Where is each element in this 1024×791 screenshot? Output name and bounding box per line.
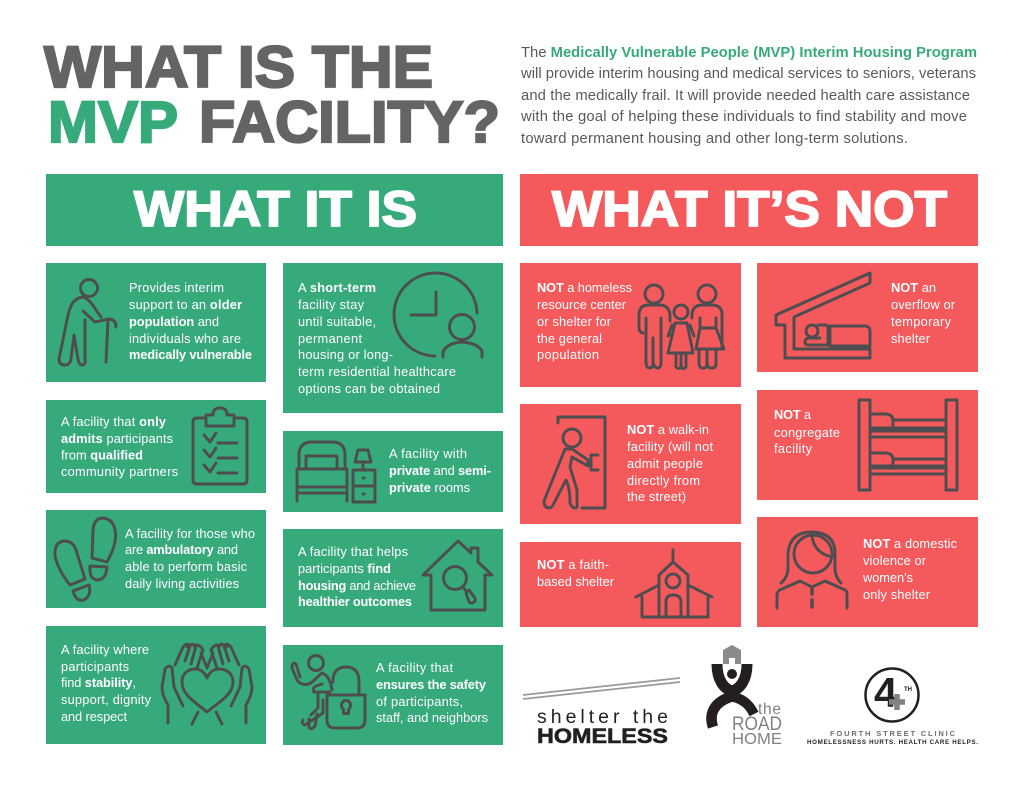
text: qualified partners: community partners	[61, 464, 178, 479]
logo: shelter the homeless: shelter the	[537, 706, 668, 728]
panel: not homeless shelter	[520, 263, 741, 387]
text: older population: Provides interim	[129, 280, 224, 295]
panel: older population	[46, 263, 266, 382]
text: find housing: healthier outcomes	[298, 594, 412, 609]
text: stability	[61, 642, 152, 724]
intro paragraph: with the goal of helping these individuals to find stability and move	[520, 109, 967, 125]
text: find housing: housing and achieve	[298, 578, 416, 593]
heading: what it is	[46, 174, 503, 246]
icon: family	[639, 285, 724, 368]
icon: footprints	[55, 518, 116, 600]
panel: safety	[283, 645, 503, 745]
text: short-term: housing or long-	[298, 347, 393, 362]
text: not congregate: NOT a	[774, 407, 812, 422]
text: not homeless shelter: resource center	[537, 297, 627, 312]
logo: fourth street clinic: 4	[874, 669, 898, 716]
icon: church	[636, 550, 712, 617]
intro paragraph: will provide interim housing and medical services to seniors, veterans	[520, 66, 976, 82]
logo: the road home	[712, 645, 782, 748]
icon: clipboard checklist	[193, 408, 247, 484]
text: short-term: options can be obtained	[298, 381, 440, 396]
logo: fourth street clinic: HOMELESSNESS HURTS. HEALTH CARE HELPS.	[807, 739, 978, 746]
icon: house with magnifier	[423, 541, 492, 610]
panel: not faith-based	[520, 542, 741, 627]
text: not homeless shelter: the general	[537, 331, 602, 346]
icon: elderly person with cane	[59, 280, 116, 365]
text: not domestic violence: violence or	[863, 553, 927, 568]
text: short-term: facility stay	[298, 297, 365, 312]
text: not walk-in: NOT a walk-in	[627, 422, 709, 437]
text: older population: individuals who are	[129, 331, 241, 346]
text: stability: support, dignity	[61, 692, 152, 707]
text: safety: A facility that	[376, 660, 453, 675]
text: stability: find stability,	[61, 675, 136, 690]
text: not congregate: congregate	[774, 425, 840, 440]
text: short-term: term residential healthcare	[298, 364, 456, 379]
text: not domestic violence: only shelter	[863, 587, 931, 602]
icon: person climbing padlock	[292, 656, 365, 729]
intro paragraph	[520, 45, 977, 147]
text: not walk-in: directly from	[627, 473, 700, 488]
text: private rooms: private rooms	[389, 480, 470, 495]
panel: short-term	[283, 263, 503, 413]
intro paragraph: and the medically frail. It will provide needed health care assistance	[521, 88, 970, 104]
text: older population: medically vulnerable	[129, 347, 252, 362]
logo: the road home: the	[758, 701, 781, 718]
text: not walk-in: admit people	[627, 456, 703, 471]
text: private rooms: private and semi-	[389, 463, 491, 478]
logo: fourth street clinic	[807, 668, 978, 746]
text: qualified partners	[61, 414, 178, 479]
text: ambulatory: daily living activities	[125, 576, 239, 591]
text: ambulatory: are ambulatory and	[125, 542, 238, 557]
text: not walk-in: facility (will not	[627, 439, 713, 454]
text: not overflow: NOT an	[891, 280, 936, 295]
panel: not domestic violence	[757, 517, 978, 627]
text: not faith-based: based shelter	[537, 574, 615, 589]
text: qualified partners: A facility that only	[61, 414, 167, 429]
text: not walk-in	[627, 422, 713, 504]
icon: bunk bed	[859, 400, 957, 490]
text: older population: population and	[129, 314, 219, 329]
panel: qualified partners	[46, 400, 266, 493]
panel: stability	[46, 626, 266, 744]
icon: woman	[777, 532, 847, 608]
text: short-term: until suitable,	[298, 314, 376, 329]
text: private rooms: A facility with	[389, 446, 467, 461]
title: WHAT IS THE	[44, 35, 433, 100]
text: ambulatory: able to perform basic	[125, 559, 248, 574]
text: not domestic violence: women’s	[862, 570, 913, 585]
intro paragraph: The Medically Vulnerable People (MVP) Interim Housing Program	[521, 45, 977, 61]
text: older population: support to an older	[129, 297, 242, 312]
text: qualified partners: admits participants	[61, 431, 173, 446]
text: short-term: A short-term	[298, 280, 376, 295]
text: ambulatory	[125, 526, 255, 591]
text: not faith-based	[537, 557, 615, 589]
text: not overflow: overflow or	[891, 297, 956, 312]
text: older population	[129, 280, 252, 362]
text: not overflow: temporary	[891, 314, 952, 329]
text: stability: A facility where	[61, 642, 149, 657]
icon: hands holding heart	[162, 644, 252, 724]
text: not overflow	[891, 280, 956, 346]
text: not homeless shelter	[537, 280, 632, 362]
text: not domestic violence: NOT a domestic	[863, 536, 958, 551]
icon: bed and nightstand	[297, 442, 375, 502]
logo: fourth street clinic: TH	[904, 687, 912, 693]
panel: private rooms	[283, 431, 503, 512]
title	[44, 35, 500, 155]
text: not homeless shelter: NOT a homeless	[537, 280, 632, 295]
logo: shelter the homeless: HOMELESS	[537, 725, 668, 748]
logo: fourth street clinic: FOURTH STREET CLINIC	[830, 729, 956, 738]
panel: not walk-in	[520, 404, 741, 524]
text: find housing: participants find	[298, 561, 391, 576]
text: not congregate	[774, 407, 840, 456]
intro paragraph: toward permanent housing and other long-term solutions.	[521, 131, 908, 147]
text: safety: staff, and neighbors	[376, 710, 488, 725]
text: find housing: A facility that helps	[298, 544, 408, 559]
text: short-term: permanent	[298, 331, 362, 346]
heading: what it's not: WHAT IT’S NOT	[552, 181, 947, 237]
text: stability: participants	[61, 659, 129, 674]
title: FACILITY?	[199, 90, 500, 155]
text: not congregate: facility	[774, 441, 813, 456]
text: ambulatory: A facility for those who	[125, 526, 255, 541]
icon: clock and person	[394, 273, 482, 357]
text: short-term	[298, 280, 456, 396]
text: private rooms	[389, 446, 491, 495]
text: not walk-in: the street)	[627, 489, 686, 504]
logo: the road home: HOME	[732, 731, 782, 748]
logo: the road home: ROAD	[732, 714, 782, 735]
panel: not overflow	[757, 263, 978, 372]
text: not overflow: shelter	[891, 331, 931, 346]
icon: person walking through door	[544, 417, 605, 508]
icon: temporary shelter with bed	[776, 273, 870, 358]
text: not homeless shelter: population	[537, 347, 599, 362]
text: not domestic violence	[862, 536, 958, 602]
text: safety: ensures the safety	[376, 677, 487, 692]
text: not faith-based: NOT a faith-	[537, 557, 609, 572]
title: MVP	[48, 90, 178, 155]
logo: shelter the homeless	[523, 678, 680, 748]
text: qualified partners: from qualified	[61, 448, 143, 462]
panel: find housing	[283, 529, 503, 627]
heading: what it's not	[520, 174, 978, 246]
heading: what it is: WHAT IT IS	[134, 181, 417, 237]
text: stability: and respect	[61, 709, 127, 724]
panel: not congregate	[757, 390, 978, 500]
text: find housing	[298, 544, 416, 609]
text: safety: of participants,	[376, 694, 463, 709]
text: safety	[376, 660, 488, 725]
text: not homeless shelter: or shelter for	[537, 314, 612, 329]
panel: ambulatory	[46, 510, 266, 608]
